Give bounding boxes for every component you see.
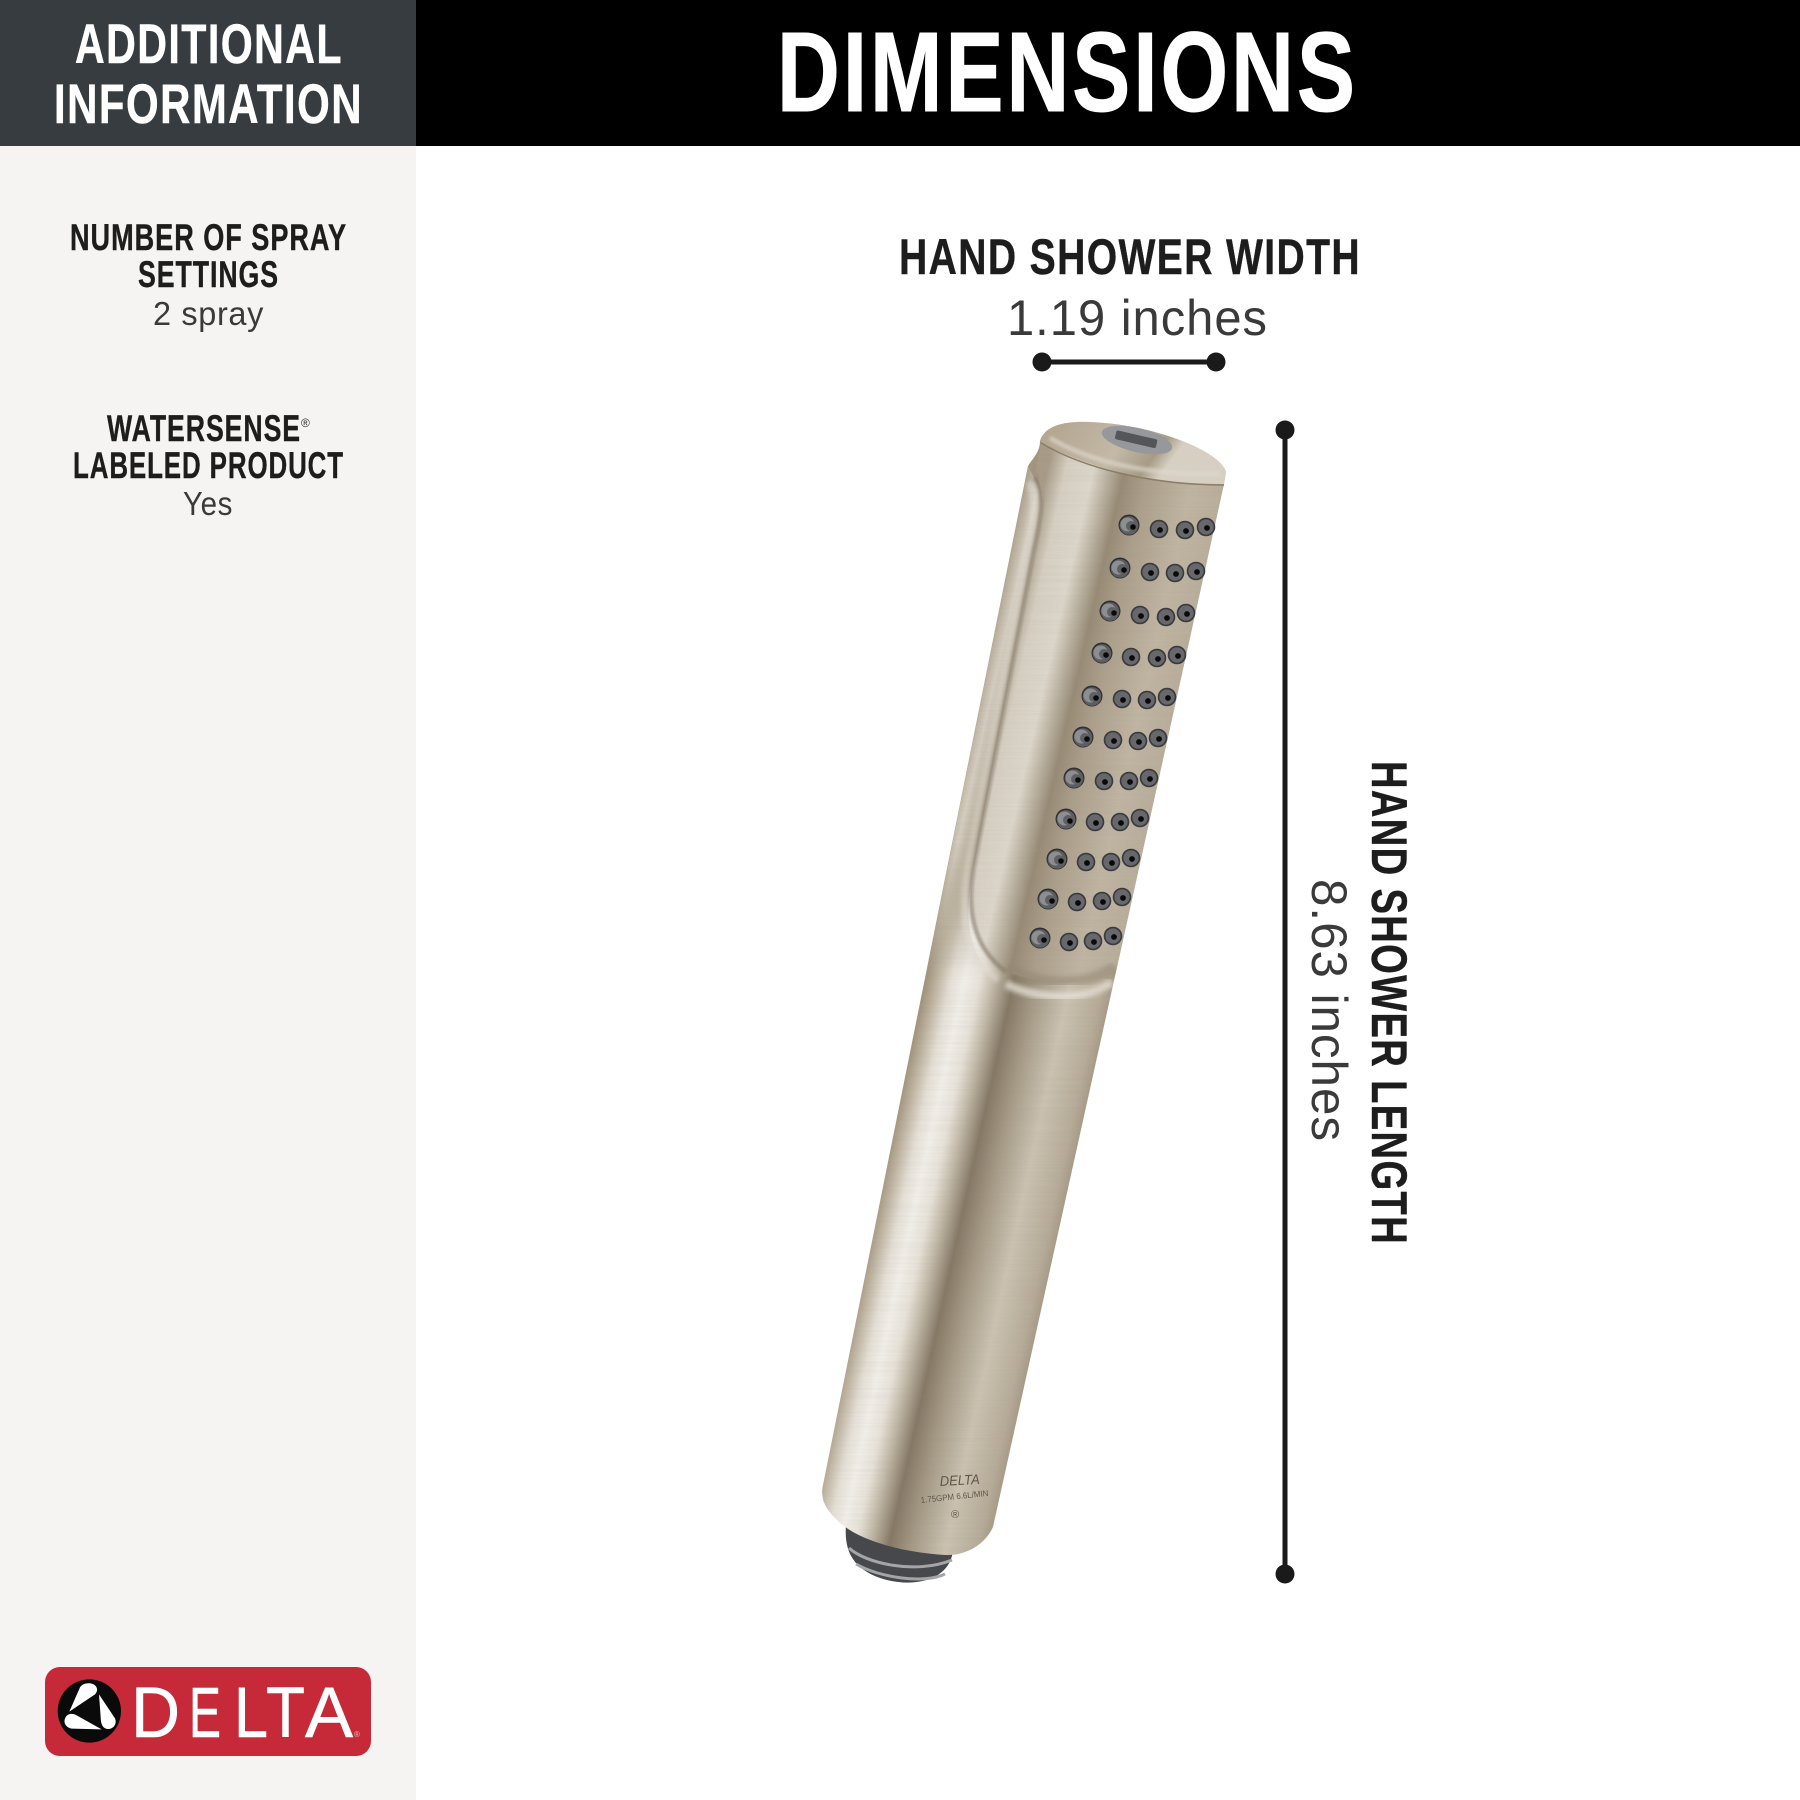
logo wordmark: T	[266, 1674, 305, 1753]
arrow: length dimension line	[1276, 420, 1294, 1584]
text: hand shower width	[899, 229, 1361, 346]
text: hand shower length: 8.63 inches	[1301, 879, 1357, 1142]
engraved product markings	[920, 1471, 989, 1521]
text block: watersense labeled product: ®	[301, 416, 310, 430]
heading: additional information	[0, 0, 416, 146]
engraved product markings: DELTA	[939, 1471, 980, 1489]
text block: watersense labeled product: WATERSENSE	[107, 408, 301, 449]
text block: number of spray settings: 2 spray	[153, 295, 264, 332]
text: hand shower length: HAND SHOWER LENGTH	[1361, 761, 1417, 1245]
recess fold shading	[971, 478, 1041, 972]
text block: watersense labeled product	[73, 408, 344, 522]
threaded connector	[846, 1525, 954, 1583]
outlet slot	[1099, 420, 1175, 460]
engraved product markings: ®	[951, 1509, 959, 1521]
spray nozzles	[1030, 514, 1215, 951]
left strip beside recess	[925, 466, 1041, 982]
logo wordmark	[131, 1674, 354, 1753]
heading: dimensions: DIMENSIONS	[777, 9, 1358, 135]
icon: delta triangle mark	[58, 1679, 121, 1743]
end cap	[1040, 422, 1226, 484]
heading: additional information: ADDITIONAL	[75, 12, 343, 75]
heading: dimensions	[416, 0, 1800, 146]
spray face recess	[973, 440, 1224, 982]
panel: additional information sidebar	[0, 0, 416, 1800]
logo wordmark: A	[305, 1674, 354, 1753]
brushed texture	[800, 410, 1250, 1570]
logo wordmark: E	[189, 1674, 221, 1753]
text: hand shower width: HAND SHOWER WIDTH	[899, 229, 1361, 285]
logo: delta: ®	[354, 1730, 360, 1739]
lower ridge	[1008, 966, 1115, 982]
text block: number of spray settings: NUMBER OF SPRAY	[70, 217, 347, 258]
text: hand shower width: 1.19 inches	[1007, 290, 1268, 346]
shower body	[822, 422, 1226, 1556]
text block: number of spray settings: SETTINGS	[138, 254, 279, 295]
text block: watersense labeled product: LABELED PRODUCT	[73, 445, 344, 486]
heading: additional information: INFORMATION	[54, 72, 363, 135]
logo wordmark: L	[234, 1674, 268, 1753]
logo wordmark: D	[131, 1674, 180, 1753]
arrow: width dimension line	[1032, 352, 1226, 372]
text block: number of spray settings	[70, 217, 347, 332]
text block: watersense labeled product: Yes	[183, 485, 233, 522]
logo: delta	[45, 1667, 371, 1756]
illustration: hand shower	[822, 422, 1226, 1583]
engraved product markings: 1.75GPM 6.6L/MIN	[920, 1488, 989, 1505]
text: hand shower length	[1301, 761, 1417, 1245]
